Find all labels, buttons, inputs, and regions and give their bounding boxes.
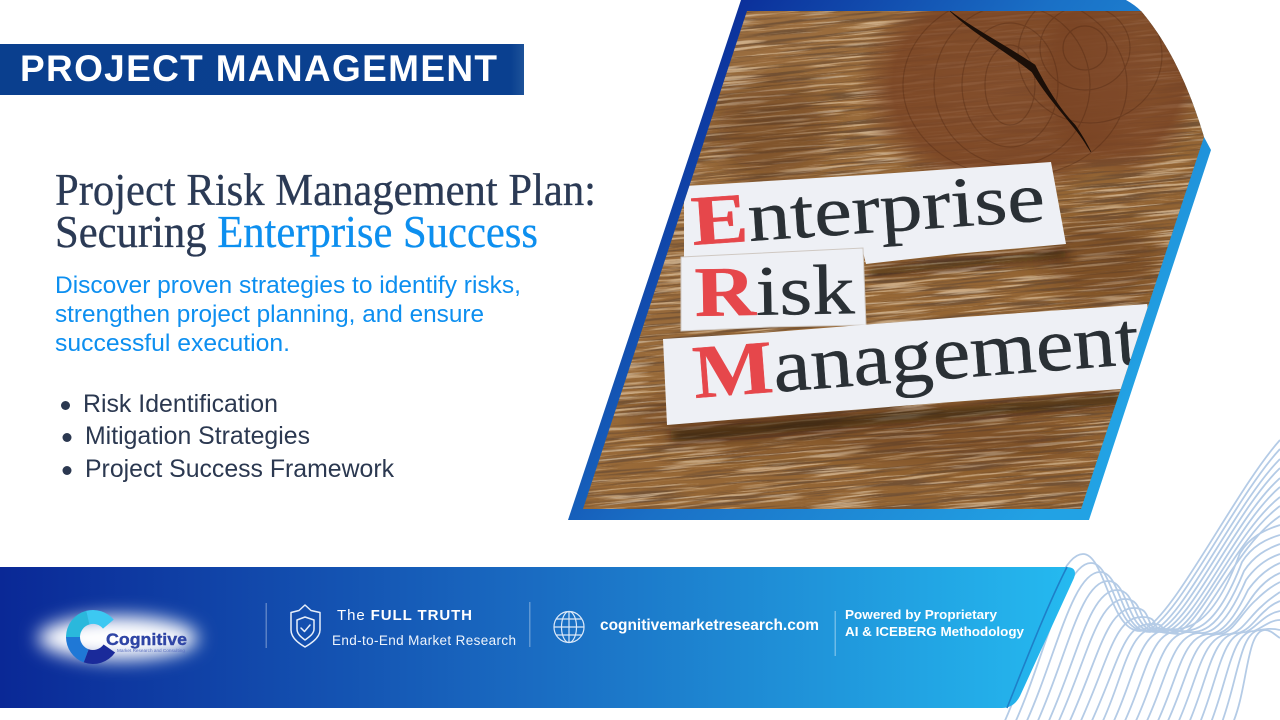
line over banner — [1007, 567, 1067, 708]
paper strip: Risk: Risk — [694, 251, 856, 332]
text: powered by: Powered by Proprietary — [845, 607, 998, 622]
paper strip: Enterprise: Enterprise — [689, 158, 1047, 261]
subheading paragraph: successful execution. — [55, 330, 290, 357]
headline: Securing Enterprise Success — [55, 207, 538, 257]
text: full truth: The FULL TRUTH — [337, 607, 472, 624]
subheading paragraph: Discover proven strategies to identify risks, — [55, 272, 521, 299]
wood crack — [950, 11, 1091, 152]
bullet list — [61, 390, 394, 483]
subheading paragraph — [55, 272, 521, 357]
paper shadows — [670, 250, 1122, 442]
panel: footer banner — [0, 567, 1075, 708]
photo: wood with paper strips — [583, 11, 1204, 509]
logo: Market Research and Consulting — [117, 648, 186, 653]
bullet list: Mitigation Strategies — [85, 422, 310, 450]
dark wood tones — [630, 80, 1160, 462]
divider — [266, 603, 267, 648]
decorative wave lines — [1003, 440, 1280, 720]
icon: shield — [291, 605, 320, 647]
text: website: cognitivemarketresearch.com — [600, 617, 819, 634]
bullet list: Risk Identification — [83, 390, 278, 418]
knot rings — [903, 0, 1162, 177]
text: full truth — [332, 607, 516, 648]
headline: Project Risk Management Plan: — [55, 165, 596, 215]
panel: category ribbon — [0, 44, 524, 95]
icon: globe — [554, 612, 584, 642]
paper strip: Management: Management — [690, 297, 1142, 415]
text: powered by — [845, 607, 1025, 639]
subheading paragraph: strengthen project planning, and ensure — [55, 301, 484, 328]
divider — [529, 602, 530, 647]
logo: Cognitive — [106, 630, 187, 649]
text: full truth: End-to-End Market Research — [332, 633, 516, 648]
knot — [859, 11, 1133, 188]
headline — [55, 165, 596, 257]
panel: photo frame — [568, 0, 1211, 520]
text: powered by: AI & ICEBERG Methodology — [845, 624, 1025, 639]
divider — [834, 611, 836, 656]
logo — [38, 610, 198, 664]
ribbon title: PROJECT MANAGEMENT — [20, 48, 497, 89]
bullet list: Project Success Framework — [85, 455, 394, 483]
